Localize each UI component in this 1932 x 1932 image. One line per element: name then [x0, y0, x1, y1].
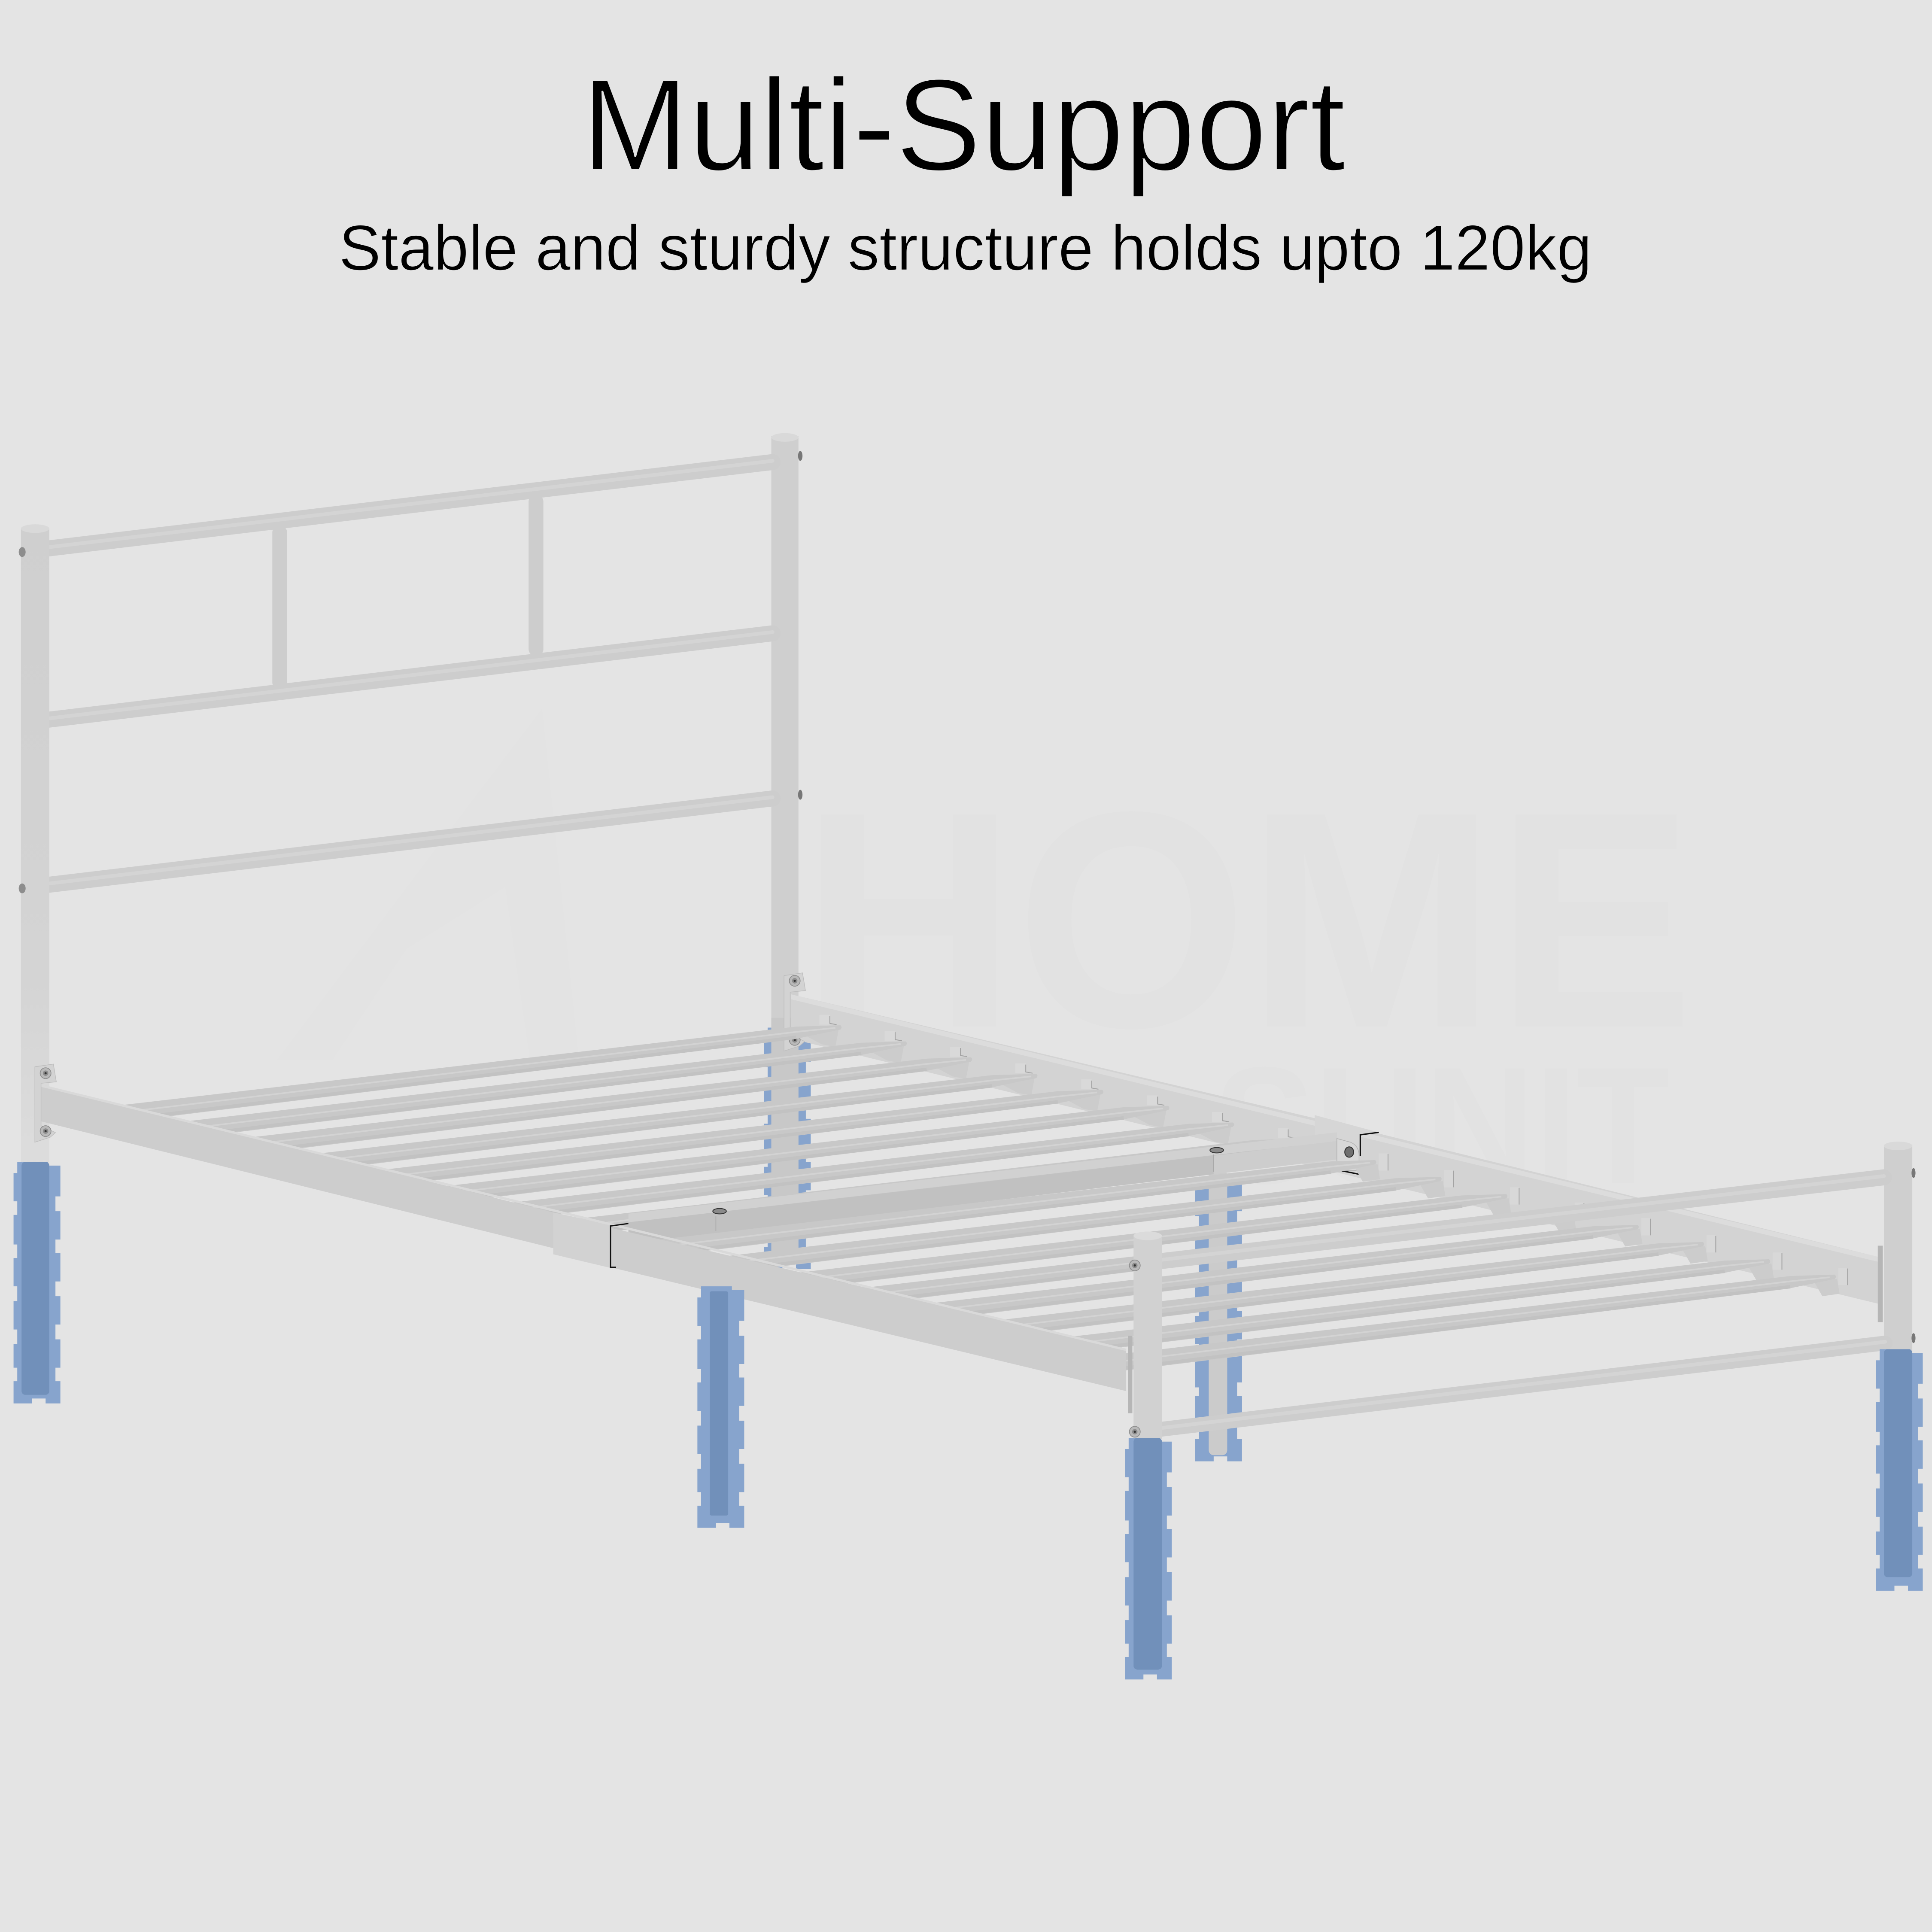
beam bracket bolt	[1345, 1147, 1354, 1157]
rear bracket	[784, 973, 805, 1051]
highlighted rear leg: footboard far, behind slats	[1195, 1177, 1242, 1461]
front rail, sleeve	[553, 1212, 611, 1268]
beam top face	[629, 1132, 1337, 1222]
footboard top rail	[1156, 1176, 1884, 1262]
bed slats	[103, 1015, 1300, 1238]
bed slats, foot half	[638, 1153, 1847, 1374]
front rail, head section	[41, 1084, 553, 1248]
watermark word two: SUNIT	[1214, 1033, 1670, 1218]
front side rail	[41, 1084, 1126, 1391]
near foot mounting plate	[1128, 1336, 1132, 1413]
rear leg post: centre under side rail	[1209, 1170, 1227, 1455]
title: Multi-Support	[582, 52, 1346, 199]
headboard bolts, left side	[19, 547, 26, 893]
beam bolt, right	[1210, 1148, 1224, 1153]
footboard	[1130, 1142, 1916, 1439]
beam joint line	[716, 1154, 1214, 1231]
footboard far post bolts	[1911, 1168, 1916, 1343]
watermark logo	[277, 708, 579, 1060]
highlighted front leg: foot far	[1876, 1349, 1923, 1591]
headboard lower rail	[44, 797, 772, 885]
front rail top edge	[41, 1084, 1126, 1351]
footboard far post	[1884, 1142, 1912, 1352]
faint brand watermark	[277, 708, 1694, 1218]
footboard near post bolts	[1130, 1260, 1140, 1437]
beam end bracket	[1337, 1139, 1359, 1170]
highlighted front leg: foot near	[1125, 1438, 1172, 1680]
front rail sleeve gap	[611, 1224, 629, 1267]
watermark word one: HOME	[801, 748, 1694, 1092]
headboard left post	[21, 524, 49, 1170]
front-left bracket	[35, 1064, 56, 1142]
footboard near post	[1133, 1231, 1162, 1439]
highlighted front leg: side rail centre	[697, 1286, 744, 1528]
beam bolt, left	[713, 1209, 726, 1214]
headboard	[19, 433, 802, 1264]
far rail sleeve joint	[1315, 1115, 1379, 1177]
subtitle: Stable and sturdy structure holds upto 120kg	[339, 212, 1592, 284]
far foot mounting plate	[1878, 1245, 1883, 1322]
beam side face, right section	[1214, 1141, 1337, 1174]
headboard right post	[772, 433, 799, 1264]
far rail sleeve gap	[1337, 1132, 1379, 1176]
headboard bolts, right side	[798, 451, 802, 800]
front rail, foot section	[611, 1228, 1126, 1391]
headboard middle rail	[44, 632, 772, 720]
headboard top rail	[44, 461, 772, 549]
far side rail	[791, 994, 1878, 1303]
beam side face	[629, 1156, 1214, 1245]
highlighted rear leg: headboard right, behind slats	[764, 1027, 811, 1269]
headboard vertical bars	[272, 495, 544, 689]
highlighted front leg: head left	[14, 1162, 61, 1403]
centre support beam	[629, 1132, 1359, 1245]
footboard bottom rail	[1156, 1342, 1885, 1430]
